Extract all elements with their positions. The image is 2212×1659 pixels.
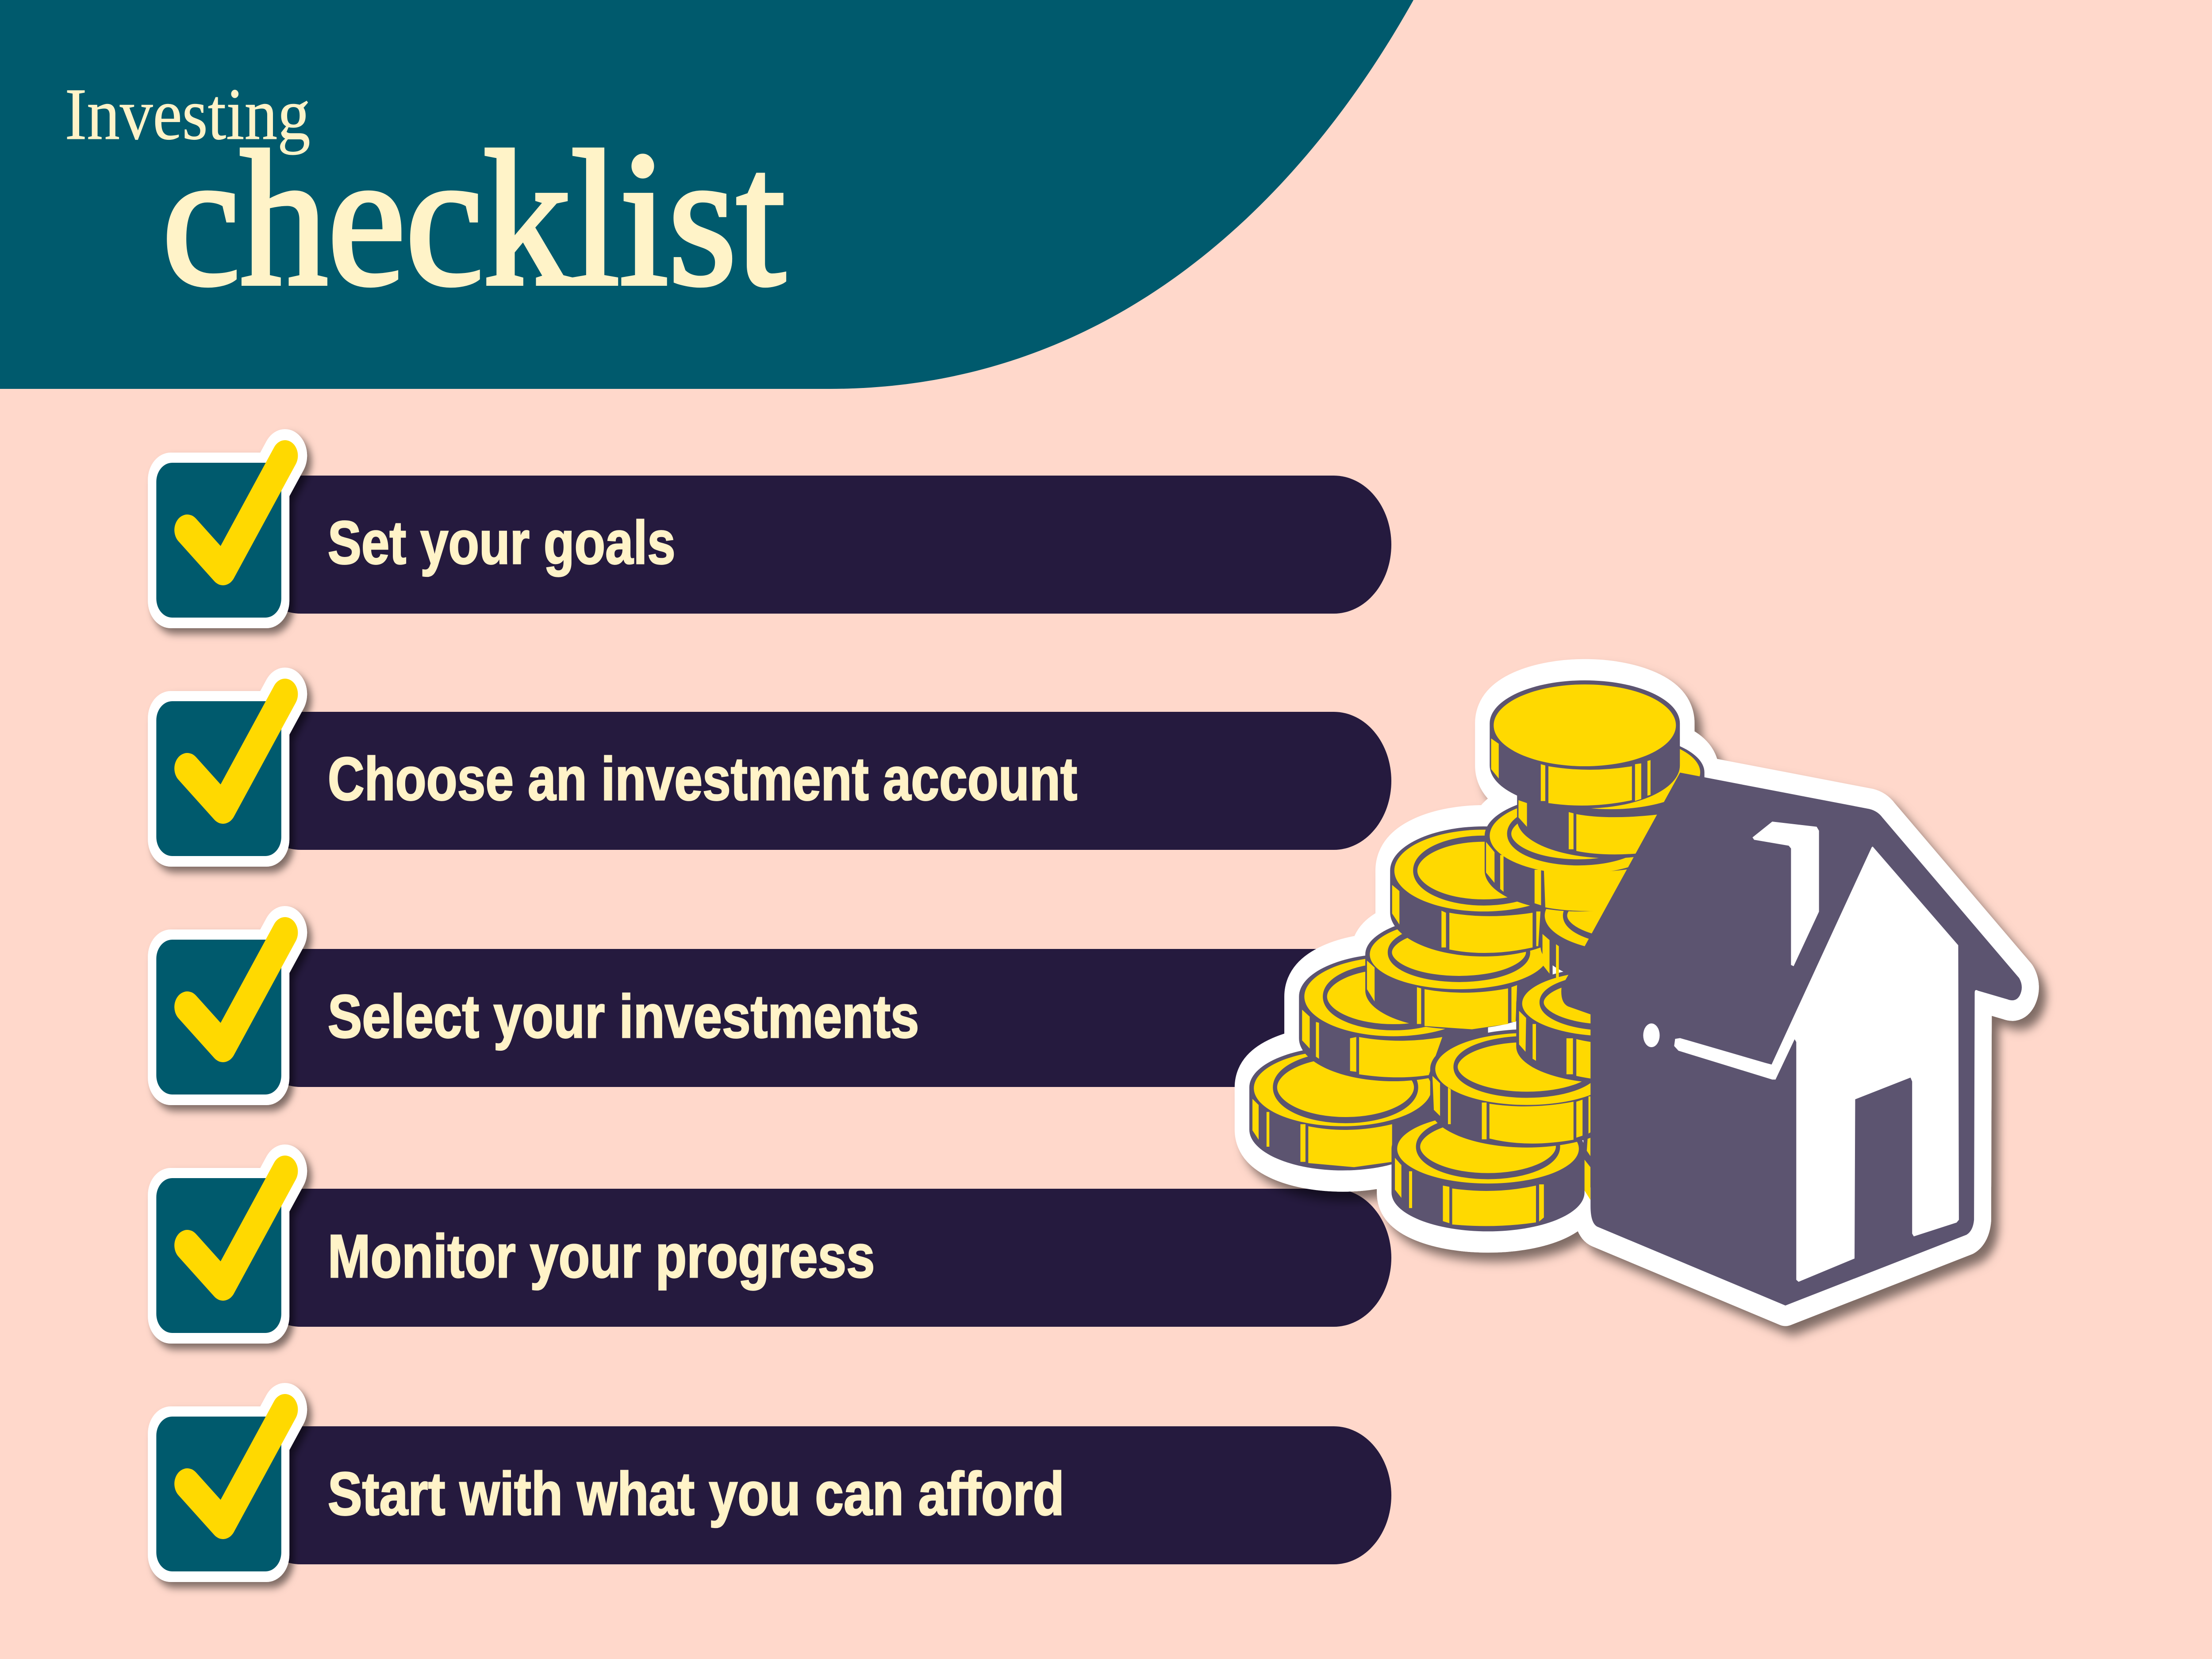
row 3: select your investments: Select your investments bbox=[328, 982, 919, 1050]
gold coin stacks bbox=[1249, 680, 1770, 1231]
coin bottom left bbox=[1249, 1046, 1436, 1171]
house icon bbox=[1561, 772, 2022, 1306]
coin far right lower bbox=[1583, 1095, 1770, 1210]
coin bottom centre bbox=[1391, 1110, 1585, 1231]
coin upper stack lower bbox=[1485, 795, 1672, 911]
row 1: set your goals bbox=[148, 453, 1391, 628]
row 2: choose an investment account bbox=[148, 691, 1391, 867]
row 1: set your goals: Set your goals bbox=[328, 508, 676, 576]
title bbox=[65, 73, 786, 326]
row 3: select your investments bbox=[148, 929, 1391, 1105]
row 4: monitor your progress bbox=[148, 1168, 1391, 1344]
row 5: start with what you can afford bbox=[148, 1406, 1391, 1582]
row 2: choose an investment account: Choose an investment account bbox=[328, 745, 1077, 813]
coin upper stack middle bbox=[1517, 733, 1705, 858]
coin right middle bbox=[1516, 967, 1705, 1083]
coin third level bbox=[1390, 826, 1578, 956]
coin left second level bbox=[1299, 954, 1488, 1081]
title: checklist bbox=[162, 111, 786, 326]
header panel bbox=[0, 0, 1413, 389]
coin top bbox=[1490, 680, 1680, 808]
coin behind house bbox=[1540, 877, 1728, 985]
coin centre lower bbox=[1430, 1029, 1624, 1148]
title: Investing bbox=[65, 73, 311, 155]
illustration: coins and house sticker bbox=[1249, 680, 2022, 1306]
row 5: start with what you can afford: Start with what you can afford bbox=[328, 1459, 1064, 1528]
coin middle level bbox=[1365, 916, 1553, 1029]
row 4: monitor your progress: Monitor your progress bbox=[328, 1222, 875, 1290]
